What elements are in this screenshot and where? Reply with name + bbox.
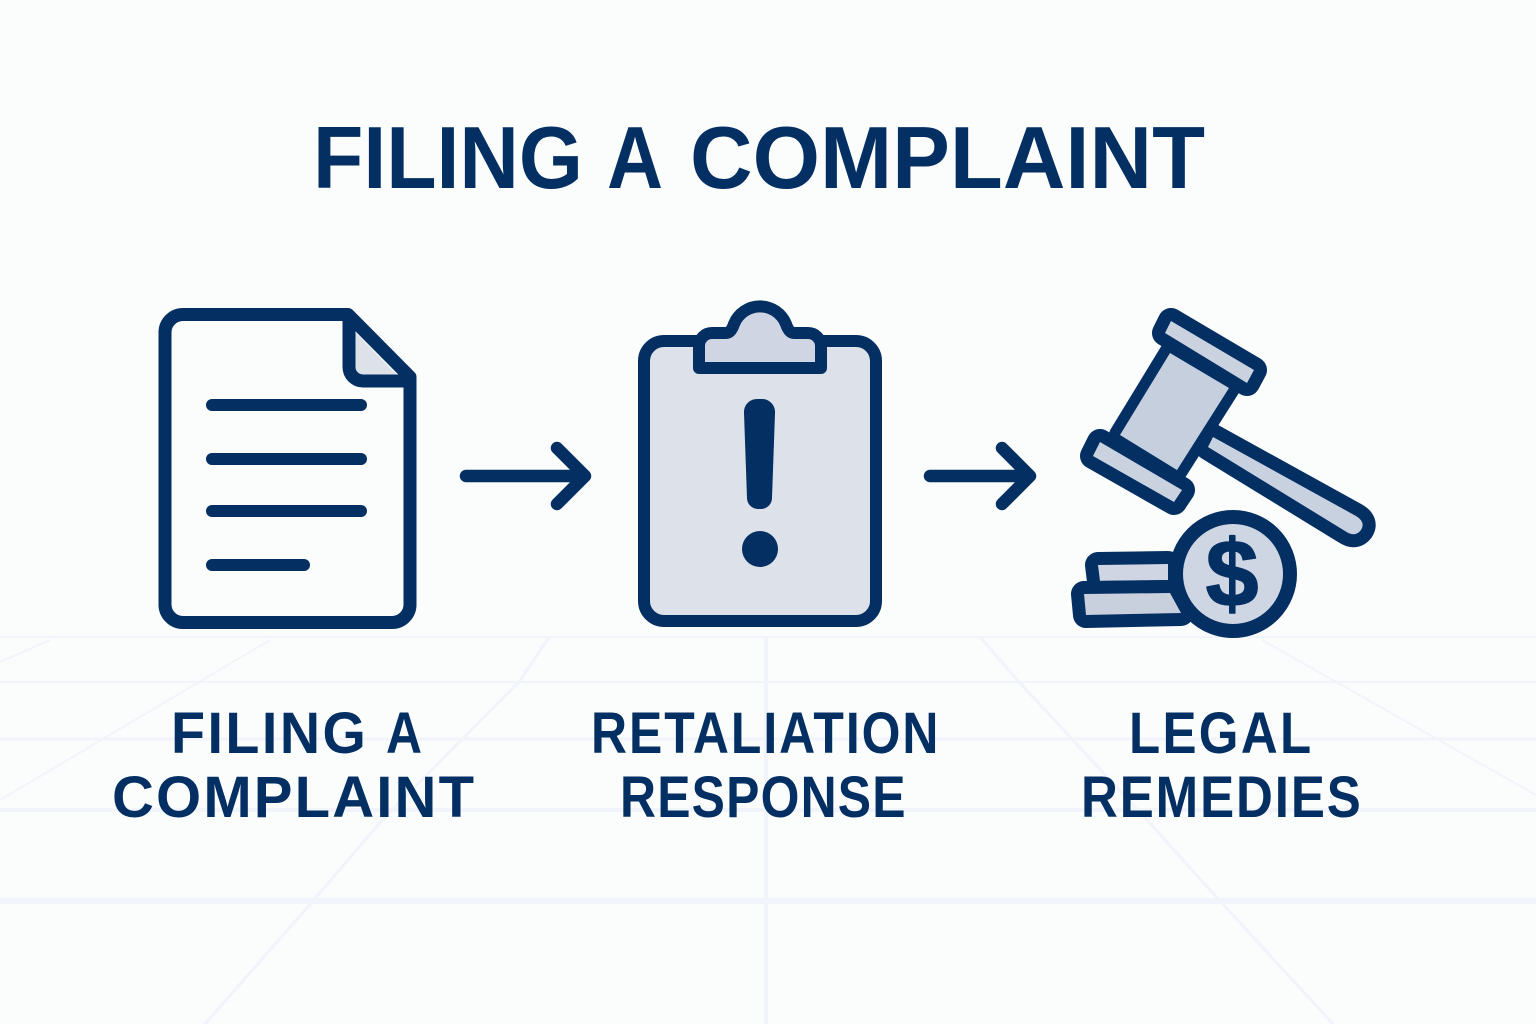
label: legal remedies: LEGAL <box>1129 701 1311 766</box>
arrow: clipboard to gavel <box>930 448 1030 504</box>
label: retaliation response: RETALIATION <box>591 702 938 766</box>
title: FILING <box>313 108 583 207</box>
title: A <box>607 108 663 207</box>
icon: clipboard with exclamation mark <box>644 306 876 621</box>
label: retaliation response: RESPONSE <box>620 766 906 830</box>
label: filing a complaint: COMPLAINT <box>112 765 474 830</box>
label: filing a complaint: FILING <box>171 702 366 766</box>
label: filing a complaint <box>112 701 474 830</box>
arrow: document to clipboard <box>466 448 585 504</box>
title: COMPLAINT <box>690 108 1205 207</box>
label: retaliation response <box>591 702 938 830</box>
label: filing a complaint: A <box>386 701 422 766</box>
icon: gavel and coins <box>1084 321 1363 631</box>
title <box>313 108 1205 207</box>
icon: gavel and coins: $ <box>1206 521 1258 627</box>
label: legal remedies <box>1081 701 1361 830</box>
label: legal remedies: REMEDIES <box>1081 765 1361 830</box>
icon: document <box>165 314 410 622</box>
